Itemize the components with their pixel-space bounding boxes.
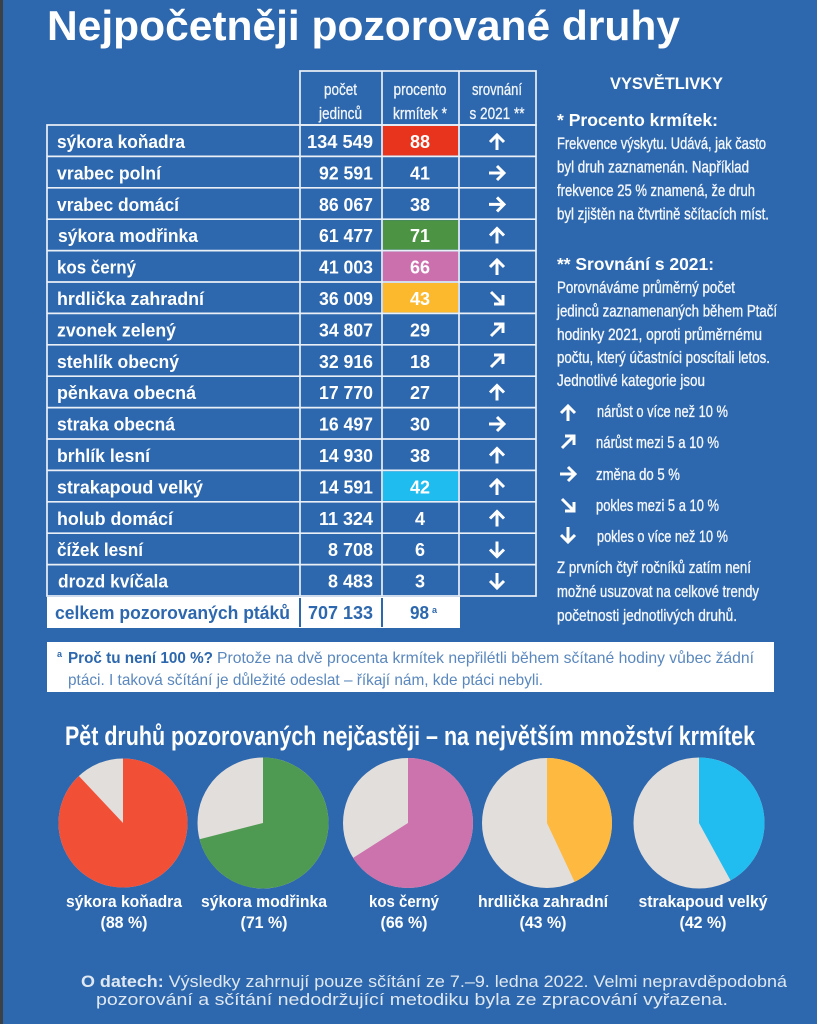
pie chart: kos černý 66 %: kos černý	[369, 893, 440, 911]
row: brhlík lesní: 14 930	[319, 446, 373, 466]
row: kos černý: 41 003	[319, 258, 373, 278]
table column headers: krmítek *	[393, 105, 447, 123]
pie chart: hrdlička zahradní 43 %: (43 %)	[520, 914, 566, 932]
row: zvonek zelený	[57, 320, 503, 340]
row: pěnkava obecná: 27	[410, 383, 430, 403]
panel: legend	[556, 74, 777, 625]
callout: why not 100 percent: ptáci. I taková sčítání je důležité odeslat – říkají nám, kde ptáci nebyli.	[68, 671, 543, 689]
row: strakapoud velký: 42	[410, 477, 430, 497]
table grid	[47, 125, 536, 596]
callout: why not 100 percent	[47, 642, 774, 692]
row: zvonek zelený: zvonek zelený	[57, 320, 176, 340]
table column headers: procento	[394, 81, 446, 99]
text block: srovnání s 2021: Jednotlivé kategorie jsou	[557, 372, 705, 390]
pie chart: hrdlička zahradní 43 %: hrdlička zahradní	[478, 893, 609, 911]
row: straka obecná: 30	[410, 415, 430, 435]
legend item: down	[561, 527, 728, 546]
pie chart: sýkora koňadra 88 %: sýkora koňadra	[66, 893, 183, 911]
row: total: celkem pozorovaných ptáků	[55, 603, 290, 623]
row: drozd kvíčala	[58, 572, 504, 592]
pie chart: hrdlička zahradní 43 %	[478, 758, 612, 932]
text block: srovnání s 2021: počtu, který účastníci poscítali letos.	[557, 349, 770, 367]
text block: procento krmítek: byl zjištěn na čtvrtině sčítacích míst.	[557, 206, 769, 224]
row: zvonek zelený: 29	[410, 320, 430, 340]
row: vrabec polní: 41	[410, 163, 430, 183]
pie chart: kos černý 66 %	[343, 758, 473, 932]
table column headers: srovnání	[472, 81, 522, 99]
legend item: up-right: nárůst mezi 5 a 10 %	[596, 434, 719, 452]
row: stehlík obecný: 32 916	[319, 352, 373, 372]
text block: procento krmítek: byl druh zaznamenán. Například	[557, 158, 749, 176]
row: hrdlička zahradní: 43	[410, 289, 430, 309]
callout: why not 100 percent: a	[57, 649, 63, 659]
row: drozd kvíčala: drozd kvíčala	[58, 572, 169, 592]
row: sýkora koňadra: sýkora koňadra	[57, 132, 186, 152]
text block: about the data: O datech: Výsledky zahrnují pouze sčítání ze 7.–9. ledna 2022. Velmi nepravděpodobná	[81, 973, 788, 991]
row: čížek lesní: čížek lesní	[57, 540, 144, 560]
row: hrdlička zahradní: 36 009	[319, 289, 373, 309]
row: sýkora modřinka: sýkora modřinka	[58, 226, 199, 246]
row: sýkora modřinka	[58, 226, 504, 246]
callout: why not 100 percent: Protože na dvě procenta krmítek nepřilétli během sčítané hodiny vůbec žádní	[217, 649, 755, 667]
row: vrabec polní	[57, 163, 504, 183]
row: vrabec polní: vrabec polní	[57, 163, 162, 183]
row: stehlík obecný: stehlík obecný	[57, 352, 179, 372]
pie chart: sýkora modřinka 71 %: sýkora modřinka	[201, 893, 328, 911]
pie chart: strakapoud velký 42 %: (42 %)	[680, 914, 726, 932]
row: total	[47, 597, 460, 628]
legend item: right: změna do 5 %	[596, 466, 680, 484]
row: drozd kvíčala: 8 483	[328, 572, 373, 592]
row: holub domácí: 4	[415, 509, 425, 529]
row: pěnkava obecná: pěnkava obecná	[57, 383, 197, 403]
legend item: down-right: pokles mezi 5 a 10 %	[596, 497, 719, 515]
table column headers	[300, 71, 536, 125]
row: holub domácí: 11 324	[319, 509, 373, 529]
table column headers: jedinců	[318, 105, 362, 123]
legend item: down: pokles o více než 10 %	[597, 528, 728, 546]
row: drozd kvíčala: 3	[415, 572, 425, 592]
row: holub domácí	[57, 509, 504, 529]
row: vrabec domácí: 38	[410, 195, 430, 215]
row: kos černý: kos černý	[57, 258, 136, 278]
row: hrdlička zahradní	[57, 289, 503, 309]
text block: trend note: Z prvních čtyř ročníků zatím není	[557, 559, 751, 577]
legend item: right	[560, 466, 680, 484]
row: pěnkava obecná: 17 770	[319, 383, 373, 403]
pie chart: sýkora modřinka 71 %: (71 %)	[240, 914, 288, 932]
text block: srovnání s 2021: Porovnáváme průměrný počet	[557, 279, 735, 297]
pie chart: sýkora koňadra 88 %	[58, 758, 188, 932]
row: strakapoud velký: strakapoud velký	[57, 477, 203, 497]
row: vrabec domácí	[57, 195, 504, 215]
row: sýkora modřinka: 61 477	[319, 226, 373, 246]
row: total: 98	[410, 603, 429, 623]
row: brhlík lesní	[57, 446, 504, 466]
row: brhlík lesní: 38	[410, 446, 430, 466]
text block: procento krmítek: frekvence 25 % znamená, že druh	[557, 182, 755, 200]
highlighted percentage cells	[383, 126, 458, 501]
row: pěnkava obecná	[57, 383, 504, 403]
row: vrabec polní: 92 591	[319, 163, 373, 183]
table column headers: s 2021 **	[470, 105, 525, 123]
pie chart: sýkora koňadra 88 %: (88 %)	[100, 914, 148, 932]
row: straka obecná	[57, 415, 504, 435]
text block: srovnání s 2021: ** Srovnání s 2021:	[557, 254, 714, 274]
legend heading: VYSVĚTLIVKY	[610, 74, 724, 93]
row: vrabec domácí: vrabec domácí	[57, 195, 180, 215]
row: holub domácí: holub domácí	[57, 509, 174, 529]
row: kos černý	[57, 258, 504, 278]
text block: procento krmítek: Frekvence výskytu. Udává, jak často	[557, 135, 766, 153]
row: total: 707 133	[308, 603, 373, 623]
row: sýkora koňadra: 88	[410, 132, 430, 152]
row: stehlík obecný	[57, 352, 503, 372]
pie chart: strakapoud velký 42 %: strakapoud velký	[638, 893, 768, 911]
row: strakapoud velký	[57, 477, 504, 497]
row: čížek lesní: 8 708	[328, 540, 373, 560]
row: straka obecná: straka obecná	[57, 415, 176, 435]
text block: trend note: možné usuzovat na celkové trendy	[557, 583, 760, 601]
text block: srovnání s 2021: hodinky 2021, oproti průměrnému	[557, 326, 762, 344]
row: strakapoud velký: 14 591	[319, 477, 373, 497]
callout: why not 100 percent: Proč tu není 100 %?	[68, 650, 213, 667]
row: vrabec domácí: 86 067	[319, 195, 373, 215]
row: zvonek zelený: 34 807	[319, 320, 373, 340]
row: straka obecná: 16 497	[319, 415, 373, 435]
text block: trend note: početnosti jednotlivých druhů.	[557, 607, 737, 625]
text block: procento krmítek: * Procento krmítek:	[557, 110, 718, 130]
legend item: up	[561, 403, 728, 421]
text block: about the data: pozorování a sčítání nedodržující metodiku byla ze zpracování vyřazena.	[96, 991, 728, 1009]
pie chart: strakapoud velký 42 %	[634, 758, 768, 932]
row: brhlík lesní: brhlík lesní	[57, 446, 151, 466]
row: stehlík obecný: 18	[410, 352, 430, 372]
row: sýkora koňadra: 134 549	[307, 132, 373, 152]
row: čížek lesní: 6	[415, 540, 425, 560]
row: hrdlička zahradní: hrdlička zahradní	[57, 289, 205, 309]
text block: about the data	[81, 973, 788, 1009]
panel: species table	[47, 71, 536, 628]
table column headers: počet	[324, 81, 357, 99]
row: čížek lesní	[57, 540, 504, 560]
legend item: up: nárůst o více než 10 %	[597, 403, 728, 421]
title: Nejpočetněji pozorované druhy	[47, 2, 681, 49]
text block: procento krmítek	[557, 110, 769, 224]
legend item: up-right	[562, 434, 719, 452]
row: sýkora koňadra	[57, 132, 504, 152]
text block: trend note	[557, 559, 760, 625]
row: sýkora modřinka: 71	[410, 226, 430, 246]
legend item: down-right	[562, 497, 719, 515]
pie chart: kos černý 66 %: (66 %)	[380, 914, 428, 932]
pie chart: sýkora modřinka 71 %	[198, 758, 328, 932]
text block: srovnání s 2021	[556, 254, 777, 390]
row: total: a	[432, 605, 438, 615]
row: kos černý: 66	[410, 258, 430, 278]
